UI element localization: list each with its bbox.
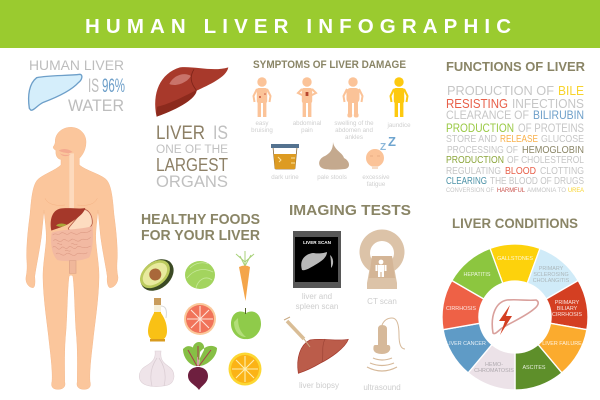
function list: CLOTTING — [540, 165, 584, 177]
icon: z z: Z — [380, 142, 386, 153]
donut labels: ASCITES — [522, 365, 546, 371]
heading: SYMPTOMS OF LIVER DAMAGE — [253, 59, 406, 71]
function list: RESISTING — [446, 96, 508, 111]
label: excessive fatigue — [362, 174, 390, 188]
function list: PRODUCTION OF — [447, 83, 554, 98]
icon: ultrasound probe — [367, 318, 405, 371]
function list: PROCESSING OF — [447, 144, 518, 156]
label: swelling: swelling of the — [334, 120, 374, 127]
food: garlic — [139, 351, 174, 386]
function list: OF CHOLESTEROL — [507, 154, 584, 166]
icon: CT scanner — [360, 230, 404, 289]
figure: easy bruising — [254, 77, 270, 117]
label: easy bruising: easy — [255, 120, 269, 127]
panel: healthy foods — [134, 211, 262, 390]
text: liver is: LIVER — [156, 123, 205, 144]
label: pale stools: pale stools — [317, 174, 347, 181]
label: liver and spleen scan: spleen scan — [296, 302, 338, 311]
donut labels: PRIMARY — [555, 300, 580, 306]
icon: liver biopsy — [284, 317, 348, 373]
label: jaundice: jaundice — [386, 122, 411, 129]
label: liver and spleen scan: liver and — [302, 292, 332, 301]
function list: CONVERSION OF — [446, 187, 494, 194]
figure: swelling — [344, 77, 362, 118]
liver organ — [51, 208, 85, 231]
icon: urine cup — [271, 144, 299, 169]
function list: THE BLOOD OF DRUGS — [490, 176, 584, 187]
function list: AMMONIA TO — [527, 187, 566, 194]
donut labels: CHROMATOSIS — [474, 368, 514, 374]
text: is 96%: 96% — [102, 76, 125, 97]
donut labels: CIRRHOSIS — [552, 312, 582, 318]
panel: liver is one of the largest organs — [155, 67, 228, 191]
donut labels: PRIMARY — [539, 266, 564, 272]
illustration: red liver — [155, 67, 228, 117]
text: water: WATER — [68, 96, 124, 115]
panel: functions of liver — [446, 59, 586, 194]
chest lines — [45, 198, 97, 205]
panel: body anatomy — [26, 127, 118, 389]
panel: imaging tests — [284, 202, 411, 392]
label: liver biopsy: liver biopsy — [299, 381, 339, 390]
heading: FUNCTIONS OF LIVER — [446, 59, 586, 74]
food: apple — [231, 308, 261, 339]
label: swelling: ankles — [345, 134, 363, 141]
function list: RELEASE — [500, 133, 538, 145]
food: lemon — [228, 352, 262, 386]
food: carrot — [236, 251, 254, 301]
donut labels: LIVER CANCER — [446, 341, 486, 347]
text: human liver: HUMAN LIVER — [29, 58, 124, 73]
panel: water content — [29, 58, 125, 115]
heading: LIVER CONDITIONS — [452, 216, 578, 231]
icon: z z — [380, 134, 396, 153]
label: excessive fatigue: fatigue — [367, 181, 386, 188]
icon: liver with lightning — [492, 300, 538, 335]
icon: pale stool — [319, 142, 349, 170]
label: swelling — [334, 120, 374, 141]
function list: CLEARING — [446, 176, 487, 187]
icon: liver scan: LIVER SCAN — [303, 240, 332, 245]
esophagus — [69, 153, 74, 208]
donut labels: HEPATITIS — [463, 272, 491, 278]
label: liver and spleen scan — [296, 292, 338, 311]
figure: abdominal pain — [298, 77, 316, 117]
text: one of the: ONE OF THE — [156, 144, 228, 156]
function list: BILE — [558, 83, 584, 98]
function list: BLOOD — [505, 165, 536, 177]
food: grapefruit — [184, 303, 216, 335]
panel: liver conditions — [442, 216, 588, 390]
mouth and throat — [59, 149, 73, 156]
function list — [446, 83, 585, 194]
text: is 96%: IS — [88, 76, 99, 97]
label: ultrasound: ultrasound — [363, 383, 401, 392]
food: beetroot — [183, 342, 217, 390]
heading: IMAGING TESTS — [289, 202, 411, 219]
panel: symptoms of liver damage — [251, 59, 411, 188]
donut labels — [446, 256, 582, 374]
function list: BILIRUBIN — [533, 108, 584, 122]
text: liver is: IS — [213, 123, 228, 144]
food: olive oil bottle — [148, 298, 167, 342]
donut labels: CIRRHOSIS — [446, 306, 476, 312]
body silhouette — [26, 127, 118, 389]
label: swelling: abdomen and — [335, 127, 373, 134]
figure: jaundice — [390, 77, 408, 117]
icon: sleeping head — [366, 134, 396, 169]
function list: PRODUCTION — [446, 121, 514, 135]
title: HUMAN LIVER INFOGRAPHIC — [85, 15, 511, 38]
food: cabbage — [185, 261, 215, 289]
label: CT scan: CT scan — [367, 297, 397, 306]
donut labels: GALLSTONES — [497, 256, 533, 262]
icon: liver scan — [293, 231, 341, 288]
stomach — [68, 209, 92, 231]
header banner — [0, 0, 600, 48]
donut labels: HEMO- — [485, 362, 503, 368]
label: easy bruising: bruising — [251, 127, 273, 134]
heading — [141, 211, 260, 244]
function list: INFECTIONS — [512, 96, 584, 111]
function list: STORE AND — [446, 133, 497, 145]
icon: z z: Z — [388, 134, 396, 149]
text: largest: LARGEST — [156, 155, 228, 175]
intestines — [51, 226, 93, 273]
label: dark urine: dark urine — [271, 174, 299, 181]
label: abdominal pain: abdominal — [293, 120, 321, 127]
label: abdominal pain: pain — [301, 127, 313, 134]
function list: GLUCOSE — [541, 133, 584, 145]
label: easy bruising — [251, 120, 273, 134]
function list: HEMOGLOBIN — [522, 144, 584, 156]
donut labels: BILIARY — [557, 306, 578, 312]
icon: blue liver outline — [29, 74, 82, 110]
heading: FOR YOUR LIVER — [141, 227, 260, 244]
label: abdominal pain — [293, 120, 321, 134]
donut labels: LIVER FAILURE — [542, 341, 582, 347]
function list: HARMFUL — [497, 187, 525, 194]
donut labels: SCLEROSING — [533, 272, 569, 278]
function list: OF PROTEINS — [518, 121, 584, 135]
heading: HEALTHY FOODS — [141, 211, 260, 228]
function list: PRODUCTION — [446, 154, 504, 166]
function list: CLEARANCE OF — [446, 108, 529, 122]
donut labels: CHOLANGITIS — [533, 278, 570, 284]
gallbladder — [56, 223, 67, 227]
function list: UREA — [568, 187, 585, 194]
donut chart — [442, 244, 588, 390]
food: avocado — [134, 253, 180, 297]
function list: REGULATING — [446, 165, 501, 177]
text: is 96% — [88, 76, 125, 97]
text: organs: ORGANS — [156, 172, 228, 191]
label: excessive fatigue: excessive — [362, 174, 390, 181]
